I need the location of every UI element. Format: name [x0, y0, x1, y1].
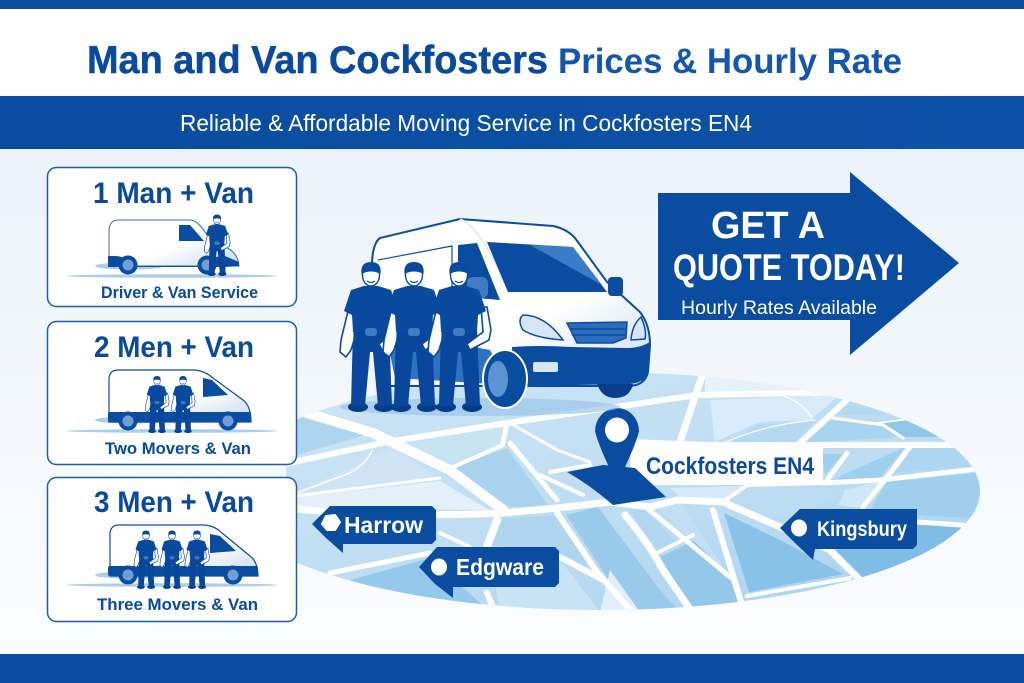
card: 1 Man + Van [48, 168, 296, 306]
fog light [533, 362, 558, 372]
tag: Edgware: Edgware [456, 554, 544, 580]
map [286, 373, 980, 610]
mirror [608, 277, 623, 296]
headlight [520, 315, 563, 340]
tag: Harrow [312, 506, 436, 553]
main van [340, 219, 650, 416]
grille [567, 322, 627, 343]
small van [67, 525, 277, 587]
subtitle band [0, 96, 1024, 149]
card: 1 Man + Van: 1 Man + Van [93, 177, 254, 210]
card: 3 Men + Van [48, 478, 296, 622]
mover [204, 214, 230, 276]
arrow callout: Hourly Rates Available [681, 298, 877, 319]
movers [134, 530, 209, 589]
top border band [0, 0, 1024, 9]
arrow callout: GET A [711, 205, 825, 247]
location block [567, 465, 666, 505]
location label: Cockfosters EN4: Cockfosters EN4 [646, 453, 815, 480]
bumper [512, 342, 650, 386]
small van [67, 370, 277, 433]
card: 3 Men + Van: 3 Men + Van [94, 486, 254, 519]
subtitle band: Reliable & Affordable Moving Service in Cockfosters EN4 [180, 110, 752, 136]
card: 2 Men + Van: Two Movers & Van [105, 439, 251, 458]
title panel [0, 9, 1024, 96]
title panel: Prices & Hourly Rate [558, 42, 902, 81]
tag: Kingsbury: Kingsbury [817, 518, 907, 541]
icon: map pin [595, 408, 639, 484]
three movers [340, 262, 491, 412]
tag: Edgware [419, 547, 559, 598]
card: 1 Man + Van: Driver & Van Service [101, 283, 258, 302]
side window [458, 243, 500, 300]
title panel: Man and Van Cockfosters [87, 39, 548, 82]
arrow callout: QUOTE TODAY! [673, 247, 905, 288]
location label: Cockfosters EN4 [630, 445, 823, 485]
bottom band [0, 654, 1024, 683]
windshield [487, 242, 607, 292]
right headlight [631, 317, 646, 340]
tag: Kingsbury [780, 509, 917, 560]
card: 3 Men + Van: Three Movers & Van [97, 595, 258, 614]
card: 2 Men + Van: 2 Men + Van [94, 331, 254, 364]
movers [145, 376, 195, 433]
front wheels [483, 350, 633, 408]
arrow callout [658, 172, 959, 355]
tag: Harrow: Harrow [344, 512, 423, 538]
small van [67, 220, 277, 278]
card: 2 Men + Van [48, 322, 296, 464]
